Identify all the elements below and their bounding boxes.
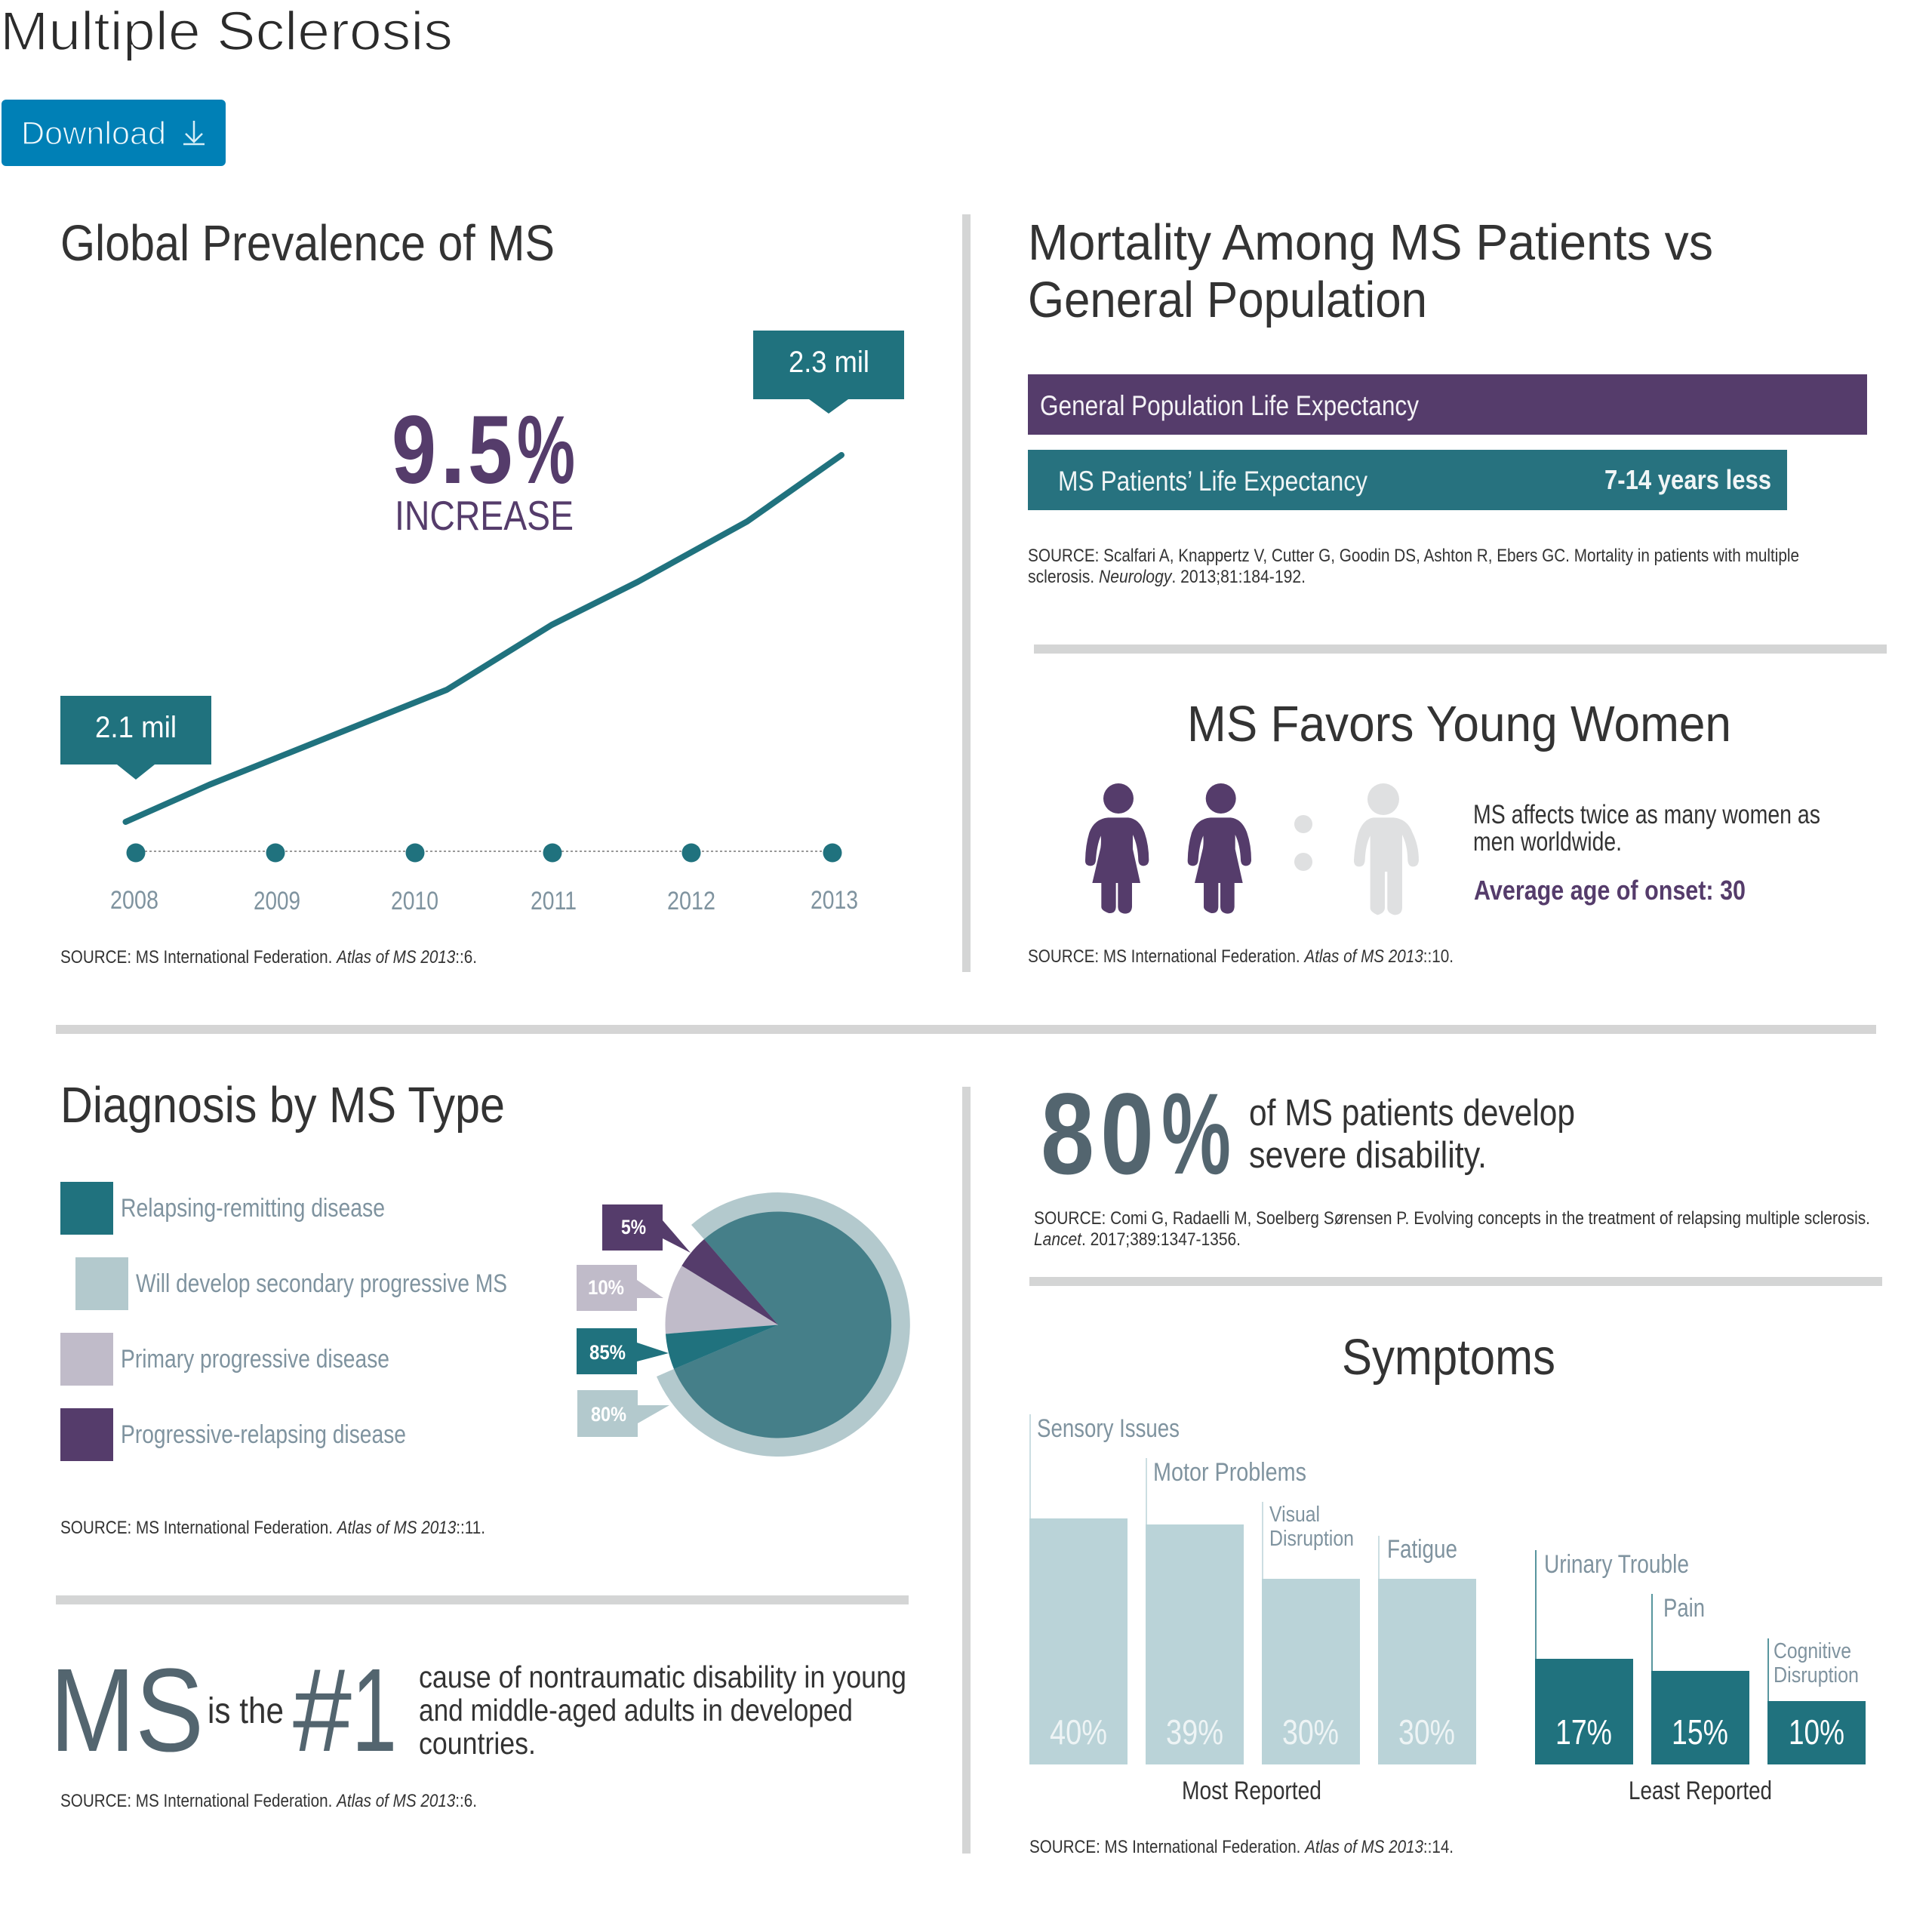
stat: MS is the #1: is the: [208, 1691, 284, 1731]
heading: global prevalence: Global Prevalence of MS: [60, 215, 555, 272]
text: twice as many women: MS affects twice as many women as: [1473, 800, 1820, 829]
source: mortality: sclerosis. Neurology. 2013;81:184-192.: [1028, 567, 1306, 587]
pie label: 10%: [577, 1265, 663, 1311]
callout: 2.1 mil: 2.1 mil: [95, 711, 177, 744]
bar chart: least reported: Cognitive: [1774, 1639, 1851, 1663]
panel: diagnosis by type: [60, 1077, 910, 1538]
axis label: least reported: Least Reported: [1629, 1777, 1772, 1805]
callout: 2.1 mil: [60, 696, 211, 780]
stat: 9.5% increase: 9: [392, 396, 436, 504]
stat: 9.5% increase: .: [440, 396, 466, 504]
text: twice as many women: [1473, 800, 1820, 857]
source: diagnosis: SOURCE: MS International Federation. Atlas of MS 2013::11.: [60, 1518, 485, 1538]
heading: diagnosis: Diagnosis by MS Type: [60, 1077, 505, 1134]
text: cause of disability: and middle-aged adults in developed: [419, 1693, 853, 1727]
stat: 9.5% increase: [392, 396, 575, 539]
bar chart: least reported: 10%: [1789, 1712, 1844, 1752]
text: average age of onset: Average age of onset: 30: [1474, 875, 1746, 906]
bar chart: most reported: Sensory Issues: [1037, 1414, 1180, 1443]
panel: severe disability: [1034, 1069, 1870, 1250]
stat: 9.5% increase: 5: [468, 396, 512, 504]
pie label: 5%: 5%: [621, 1216, 646, 1238]
stat: MS is the #1: 1: [352, 1644, 397, 1777]
bar chart: least reported: Pain: [1663, 1594, 1705, 1623]
stat: 80%: 0: [1100, 1069, 1154, 1198]
bar chart: most reported: 30%: [1398, 1712, 1455, 1752]
stat: 80%: %: [1161, 1069, 1231, 1198]
heading: mortality: [1028, 214, 1713, 328]
legend: Progressive-relapsing disease: [121, 1420, 406, 1449]
text: cause of disability: cause of nontraumatic disability in young: [419, 1660, 906, 1694]
bar chart: most reported: 40%: [1050, 1712, 1107, 1752]
heading: symptoms: Symptoms: [1342, 1329, 1555, 1386]
stat: MS is the #1: #: [293, 1644, 352, 1777]
divider right upper: [1034, 645, 1887, 654]
source: global prevalence: SOURCE: MS International Federation. Atlas of MS 2013::6.: [60, 947, 477, 968]
pie label: 10%: 10%: [588, 1276, 624, 1299]
text: severe disability: severe disability.: [1249, 1135, 1487, 1176]
stat: MS is the #1: MS: [50, 1644, 204, 1777]
bar chart: most reported: Visual: [1269, 1503, 1320, 1527]
pie label: 5%: [602, 1204, 691, 1253]
bar chart: most reported: Fatigue: [1387, 1535, 1457, 1564]
pie label: 80%: [577, 1390, 669, 1437]
callout: 2.3 mil: 2.3 mil: [789, 346, 869, 379]
timeline axis: 2013: [811, 886, 858, 915]
source: young women: SOURCE: MS International Federation. Atlas of MS 2013::10.: [1028, 946, 1454, 967]
heading: mortality: Mortality Among MS Patients vs: [1028, 214, 1713, 271]
axis label: most reported: Most Reported: [1182, 1777, 1321, 1805]
stat: MS is the #1: [50, 1644, 397, 1777]
text: twice as many women: men worldwide.: [1473, 827, 1622, 857]
panel: mortality: [1028, 214, 1867, 587]
download button: Download: [21, 115, 166, 152]
legend: [60, 1182, 507, 1461]
panel: young women: [1028, 696, 1820, 967]
bar chart: most reported: 30%: [1282, 1712, 1339, 1752]
icon: woman 1: [1085, 783, 1149, 914]
bar: MS patients: 7-14 years less: [1604, 464, 1771, 495]
heading: mortality: General Population: [1028, 272, 1427, 328]
bar chart: most reported: 39%: [1166, 1712, 1223, 1752]
source: severe disability: [1034, 1208, 1870, 1250]
vertical divider top: [962, 214, 971, 972]
heading: young women: MS Favors Young Women: [1187, 696, 1731, 752]
source: symptoms: SOURCE: MS International Federation. Atlas of MS 2013::14.: [1029, 1837, 1454, 1857]
stat: 80%: 8: [1041, 1069, 1094, 1198]
icon: woman 2: [1188, 783, 1251, 914]
download button: [2, 100, 226, 166]
callout: 2.3 mil: [753, 331, 904, 414]
icon: ratio colon: [1294, 815, 1312, 871]
icon: man: [1354, 783, 1419, 915]
source: severe disability: Lancet. 2017;389:1347-1356.: [1034, 1229, 1241, 1250]
timeline axis: 2012: [667, 887, 715, 915]
pie label: 85%: 85%: [589, 1341, 626, 1364]
legend: Will develop secondary progressive MS: [136, 1269, 507, 1298]
pie chart: [657, 1192, 910, 1457]
bar: MS patients: MS Patients’ Life Expectancy: [1058, 466, 1367, 497]
text: cause of disability: [419, 1660, 906, 1761]
main horizontal divider: [56, 1025, 1876, 1034]
source: mortality: SOURCE: Scalfari A, Knappertz V, Cutter G, Goodin DS, Ashton R, Ebers GC. Mortality in patients with multiple: [1028, 546, 1799, 566]
divider right lower: [1029, 1277, 1882, 1286]
source: number one: SOURCE: MS International Federation. Atlas of MS 2013::6.: [60, 1791, 477, 1811]
bar chart: least reported: [1535, 1550, 1866, 1764]
timeline axis: 2011: [531, 887, 577, 915]
vertical divider bottom: [962, 1087, 971, 1854]
bar: general population: General Population Life Expectancy: [1040, 390, 1419, 421]
panel: number one cause: [50, 1644, 906, 1811]
pie label: 80%: 80%: [591, 1403, 626, 1426]
legend: Relapsing-remitting disease: [121, 1194, 385, 1223]
divider left lower: [56, 1595, 909, 1604]
timeline axis: 2009: [254, 887, 300, 915]
bar chart: most reported: Disruption: [1269, 1527, 1354, 1551]
bar chart: most reported: Motor Problems: [1153, 1458, 1306, 1487]
bar chart: least reported: 17%: [1555, 1712, 1612, 1752]
pie label: 85%: [577, 1328, 669, 1374]
bar chart: most reported: [1029, 1414, 1476, 1764]
timeline axis: 2010: [391, 887, 438, 915]
text: severe disability: [1249, 1093, 1575, 1176]
bar chart: least reported: Disruption: [1774, 1663, 1859, 1687]
stat: 80%: [1041, 1069, 1231, 1198]
bar chart: least reported: Urinary Trouble: [1544, 1550, 1689, 1579]
timeline axis: 2008: [110, 886, 158, 915]
text: severe disability: of MS patients develop: [1249, 1093, 1575, 1134]
panel: symptoms: [1029, 1329, 1866, 1857]
source: mortality: [1028, 546, 1799, 587]
bar: general population: [1028, 374, 1867, 435]
timeline axis: [110, 844, 858, 915]
page title: Multiple Sclerosis: [0, 2, 453, 62]
bar chart: least reported: 15%: [1672, 1712, 1728, 1752]
text: cause of disability: countries.: [419, 1726, 536, 1761]
legend: Primary progressive disease: [121, 1345, 389, 1374]
panel: global prevalence: [60, 215, 904, 968]
stat: 9.5% increase: INCREASE: [395, 492, 574, 539]
stat: 9.5% increase: %: [517, 396, 575, 504]
bar: MS patients: [1028, 450, 1787, 510]
line chart: [125, 455, 841, 822]
